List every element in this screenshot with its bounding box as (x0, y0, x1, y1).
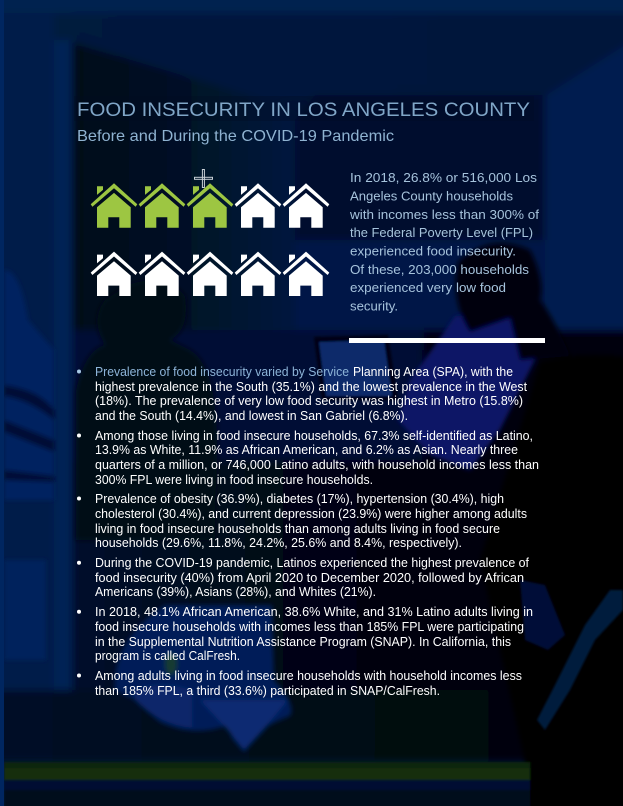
bullet 3: health conditions: Prevalence of obesity (36.9%), diabetes (17%), hypertension (30.4%), high (95, 492, 504, 506)
bullet 1: prevalence by SPA: highest prevalence in the South (35.1%) and the lowest prevalence in the West (95, 380, 528, 394)
icon: green house 1 (91, 183, 137, 228)
bullet 4: COVID-19 pandemic (77, 556, 530, 599)
bullet 1: prevalence by SPA: and the South (14.4%), and lowest in San Gabriel (6.8%). (95, 409, 408, 423)
right person with dark hair and blue shirt (398, 243, 623, 785)
bullet 5: SNAP participation by race: In 2018, 48.1% African American, 38.6% White, and 31% Latino adults living in (95, 605, 533, 619)
bullet 2: demographics: 13.9% as White, 11.9% as African American, and 6.2% as Asian. Nearly three (95, 443, 518, 457)
summary paragraph (349, 170, 539, 314)
bullet 1: prevalence by SPA: Planning Area (SPA), with the (353, 365, 513, 379)
icon: green house 2 (139, 183, 185, 228)
bullet 2: demographics: Among those living in food insecure households, 67.3% self-identified as Latino, (95, 429, 533, 443)
bullet 2: demographics (77, 429, 539, 487)
white divider bar (349, 338, 545, 343)
summary paragraph: Angeles County households (350, 188, 514, 204)
bullet 2: demographics: 300% FPL were living in food insecure households. (95, 473, 373, 487)
bullet 5: SNAP participation by race: in the Supplemental Nutrition Assistance Program (SNAP). In California, this (95, 635, 511, 649)
bullet 1: prevalence by SPA (77, 365, 528, 423)
bullet list (77, 365, 539, 698)
icon: white house 6 (91, 252, 137, 296)
laptop (314, 335, 398, 400)
left person in hood (4, 270, 54, 660)
bullet 6: SNAP/CalFresh participation: Among adults living in food insecure households with household incomes less (95, 669, 522, 683)
icon: white house 10 (283, 252, 329, 296)
icon: white house 9 (235, 252, 281, 296)
summary paragraph: In 2018, 26.8% or 516,000 Los (350, 170, 538, 185)
icon: white house 4 (235, 183, 281, 228)
bullet 1: prevalence by SPA: Prevalence of food insecurity varied by Service (95, 365, 349, 379)
bullet 3: health conditions: households (29.6%, 11.8%, 24.2%, 25.6% and 8.4%, respectively). (95, 536, 462, 550)
summary paragraph: experienced very low food (350, 280, 506, 295)
bullet 1: prevalence by SPA: (18%). The prevalence of very low food security was highest in Metro (15.8%) (95, 394, 523, 408)
bullet 5: SNAP participation by race (77, 605, 533, 663)
bullet 4: COVID-19 pandemic: During the COVID-19 pandemic, Latinos experienced the highest prevalence of (95, 556, 530, 570)
icon: white house 5 (283, 183, 329, 228)
summary paragraph: security. (350, 298, 398, 314)
icon: green house 3 (187, 183, 233, 228)
grocery bags (115, 605, 292, 752)
title: FOOD INSECURITY IN LOS ANGELES COUNTY (77, 99, 530, 121)
house pictogram: 3 of 10 green (91, 183, 329, 296)
subtitle: Before and During the COVID-19 Pandemic (77, 128, 394, 145)
bullet 3: health conditions: living in food insecure households than among adults living in food secure (95, 522, 500, 536)
summary paragraph: experienced food insecurity. (350, 244, 516, 258)
summary paragraph: with incomes less than 300% of (349, 207, 539, 222)
icon: white house 8 (187, 252, 233, 296)
bullet 4: COVID-19 pandemic: Americans (39%), Asians (28%), and Whites (21%). (95, 585, 376, 599)
icon: white house 7 (139, 252, 185, 296)
bullet 3: health conditions (77, 492, 527, 550)
bullet 6: SNAP/CalFresh participation: than 185% FPL, a third (33.6%) participated in SNAP/CalFresh. (95, 684, 440, 698)
icon: crosshair cursor (194, 170, 212, 188)
green step and floor edge (4, 740, 623, 806)
left page edge strip (0, 0, 4, 806)
bullet 5: SNAP participation by race: program is called CalFresh. (95, 649, 240, 663)
summary paragraph: the Federal Poverty Level (FPL) (350, 225, 533, 240)
bullet 2: demographics: quarters of a million, or 746,000 Latino adults, with household incomes less than (95, 458, 539, 472)
summary paragraph: Of these, 203,000 households (350, 262, 530, 277)
seated woman silhouette (76, 280, 217, 540)
bullet 6: SNAP/CalFresh participation (77, 669, 522, 698)
bullet 3: health conditions: cholesterol (30.4%), and current depression (23.9%) were higher among adults (95, 507, 527, 521)
bullet 4: COVID-19 pandemic: food insecurity (40%) from April 2020 to December 2020, followed by African (95, 571, 524, 585)
bullet 5: SNAP participation by race: food insecure households with incomes less than 185% FPL were participating (95, 620, 524, 634)
coat on the right (520, 580, 623, 730)
